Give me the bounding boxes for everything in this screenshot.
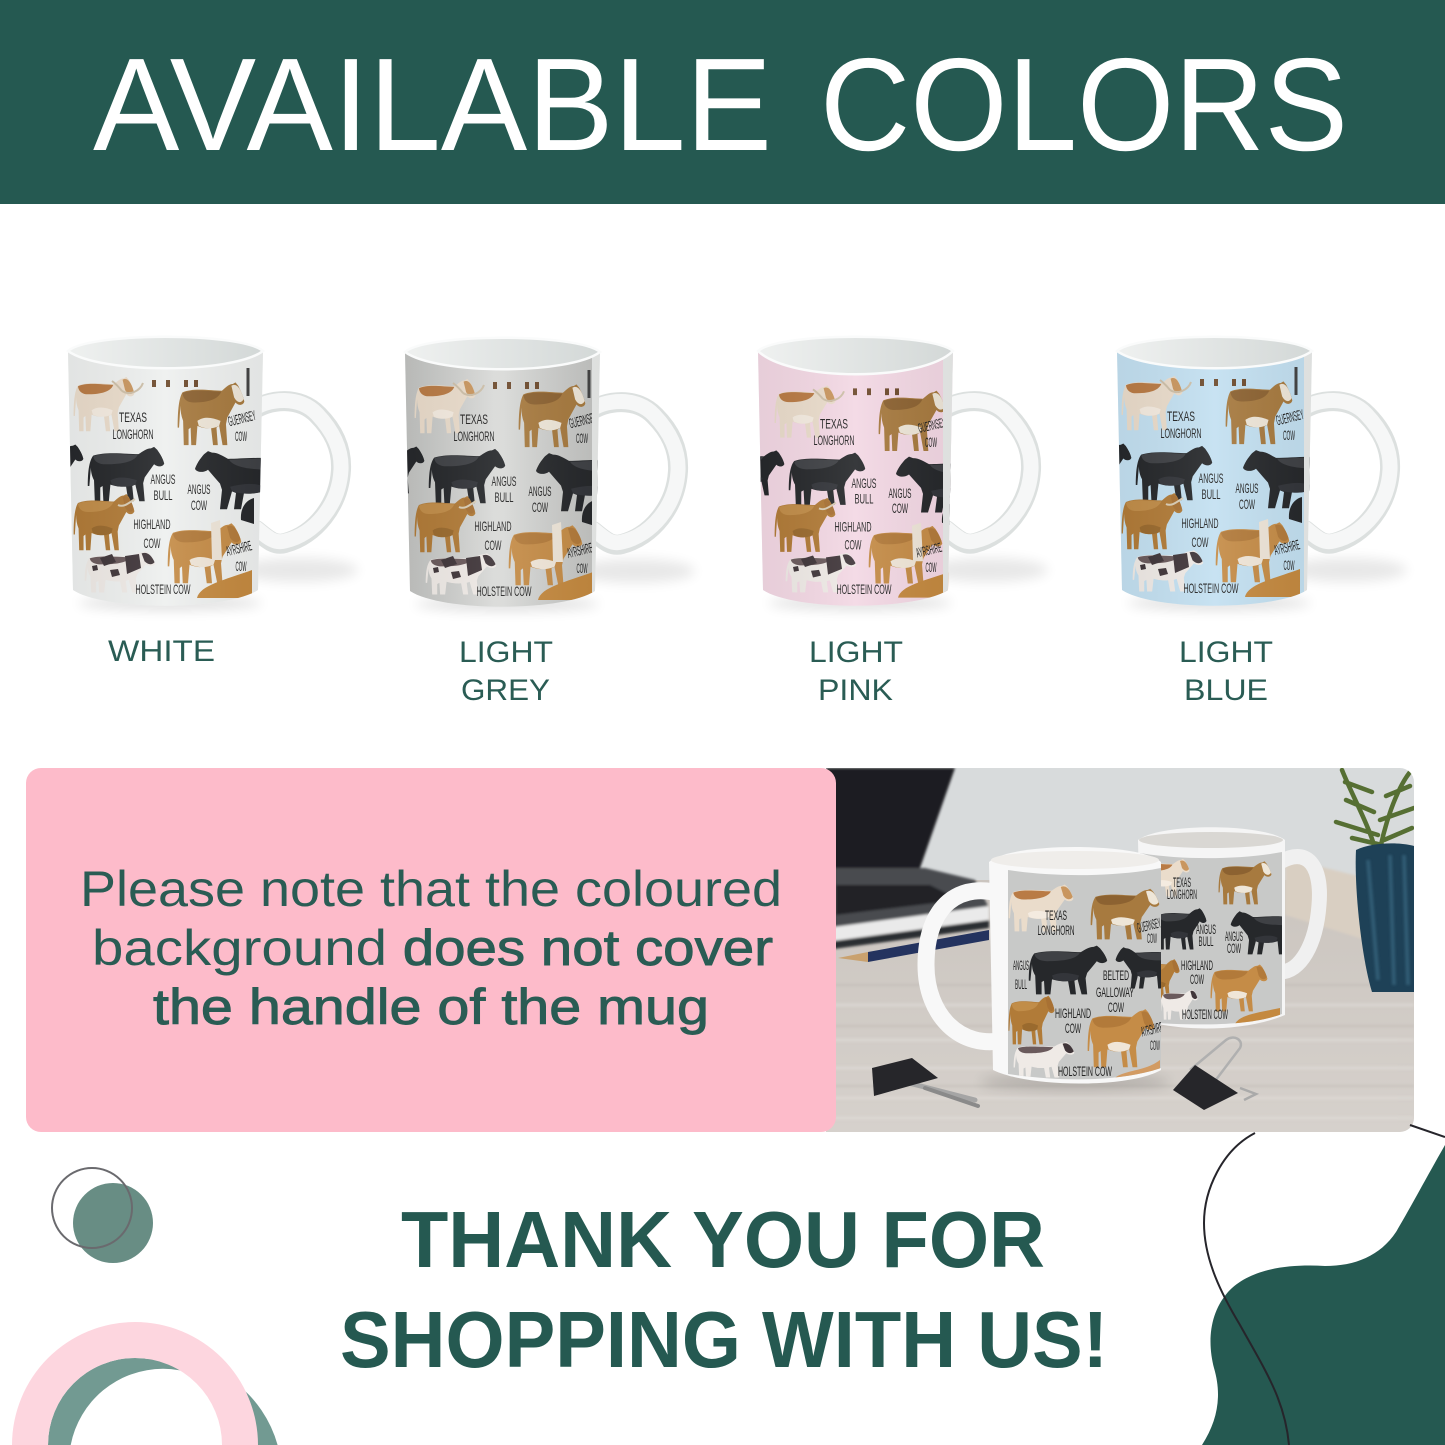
cow print: ANGUS	[852, 476, 877, 491]
front mug print: COW	[1065, 1020, 1081, 1036]
cow print	[758, 353, 953, 606]
back mug print: BULL	[1198, 933, 1214, 949]
cow print: COW	[144, 535, 161, 551]
cow print: LONGHORN	[1160, 425, 1202, 441]
circles decoration	[52, 1168, 153, 1263]
cow print: COW	[191, 497, 207, 513]
colour labels	[108, 635, 1273, 707]
cow print	[70, 368, 261, 598]
front mug	[926, 847, 1174, 1090]
front mug print: LONGHORN	[1038, 922, 1074, 938]
cow print	[1117, 352, 1310, 606]
front mug print: BELTED	[1103, 967, 1129, 983]
cow print: COW	[1284, 557, 1295, 573]
colour labels: LIGHT	[459, 636, 553, 669]
cow print: HIGHLAND	[835, 520, 872, 534]
cow print: GUERNSEY	[1274, 406, 1306, 428]
cow print: BULL	[154, 487, 173, 503]
cow print: LONGHORN	[813, 433, 854, 448]
cow print: BULL	[1202, 486, 1221, 502]
front mug print: TEXAS	[1045, 907, 1067, 923]
cow print: COW	[236, 558, 247, 574]
note text: background does not cover	[92, 920, 773, 976]
wall and desk	[826, 768, 1416, 1132]
cow print: HOLSTEIN COW	[476, 583, 532, 599]
front mug print: COW	[1150, 1037, 1160, 1053]
colour labels: PINK	[818, 674, 893, 707]
cow print: TEXAS	[460, 411, 488, 427]
cow print: COW	[576, 560, 588, 576]
cow print: HOLSTEIN COW	[1184, 580, 1239, 596]
back mug print: HIGHLAND	[1181, 957, 1213, 973]
front mug print: ANGUS	[1013, 957, 1029, 973]
cow print: COW	[1239, 496, 1255, 512]
back mug print: TEXAS	[1173, 874, 1191, 890]
photo: mugs on a desk: AYRSHIRE	[1139, 1019, 1164, 1040]
thank you message: THANK YOU FOR	[401, 1195, 1045, 1284]
cow print: ANGUS	[1236, 480, 1258, 496]
cow print: ANGUS	[188, 481, 210, 497]
mug: light pink	[758, 338, 1046, 614]
cow print: ANGUS	[492, 473, 516, 489]
cow print: COW	[484, 537, 502, 553]
front mug print: BULL	[1015, 976, 1027, 992]
back mug print: COW	[1190, 971, 1204, 987]
cow print: BULL	[855, 492, 874, 507]
cow print: TEXAS	[119, 409, 147, 425]
cow print: TEXAS	[820, 417, 848, 432]
cow print: COW	[576, 430, 588, 446]
cow print: AYRSHIRE	[224, 537, 253, 559]
note text	[80, 861, 782, 1035]
pencil	[838, 930, 989, 962]
cow print: ANGUS	[888, 486, 912, 501]
front mug print: HIGHLAND	[1055, 1005, 1091, 1021]
plant and vase	[1336, 770, 1414, 992]
colour labels: GREY	[461, 674, 550, 707]
mug: white	[68, 338, 356, 614]
cow print: ANGUS	[528, 483, 552, 499]
cow print: LONGHORN	[454, 428, 494, 444]
cow print: BULL	[494, 489, 514, 505]
cow print	[405, 354, 598, 607]
back mug print: COW	[1227, 940, 1241, 956]
cow print: HIGHLAND	[474, 518, 512, 534]
cow print: COW	[926, 560, 937, 575]
back mug print: ANGUS	[1225, 928, 1243, 944]
title	[93, 31, 1348, 178]
front mug print	[1008, 868, 1161, 1080]
colour labels: WHITE	[108, 635, 215, 668]
thank you message: SHOPPING WITH US!	[340, 1295, 1108, 1384]
back mug print	[1140, 852, 1282, 1024]
back mug print: HOLSTEIN COW	[1182, 1006, 1228, 1022]
cow print: GUERNSEY	[916, 415, 947, 436]
mug: light grey	[405, 339, 692, 614]
colour labels: BLUE	[1184, 674, 1268, 707]
mug: light blue	[1117, 338, 1404, 614]
title: COLORS	[820, 31, 1348, 178]
cow print: HIGHLAND	[1182, 515, 1218, 531]
cow print: HOLSTEIN COW	[136, 581, 191, 597]
cow print: AYRSHIRE	[914, 540, 943, 560]
binder clip right	[1173, 1038, 1256, 1110]
cow print: HIGHLAND	[134, 516, 170, 532]
cow print: GUERNSEY	[567, 409, 599, 431]
ring decoration	[12, 1322, 278, 1445]
note text: Please note that the coloured	[80, 861, 782, 917]
cow print: COW	[925, 435, 937, 450]
cow print: AYRSHIRE	[565, 539, 594, 561]
binder clip left	[872, 1058, 978, 1106]
cow print: TEXAS	[1167, 408, 1195, 424]
curved line decoration	[1204, 1125, 1445, 1445]
photo: mugs on a desk: GUERNSEY	[1135, 914, 1163, 936]
cow print: HOLSTEIN COW	[836, 582, 892, 597]
front mug print: COW	[1108, 999, 1124, 1015]
front mug print: COW	[1147, 930, 1157, 946]
back mug print: LONGHORN	[1167, 886, 1197, 902]
thank you message	[340, 1195, 1108, 1384]
cow print: COW	[845, 538, 862, 553]
cow print: COW	[892, 501, 908, 516]
cow print: ANGUS	[150, 471, 176, 487]
front mug print: HOLSTEIN COW	[1058, 1063, 1112, 1079]
cow print: AYRSHIRE	[1272, 536, 1301, 558]
cow print: COW	[532, 499, 548, 515]
note text: the handle of the mug	[153, 979, 709, 1035]
cow print: COW	[1283, 427, 1295, 443]
cow print: GUERNSEY	[226, 407, 258, 429]
cow print: ANGUS	[1198, 470, 1224, 486]
blob decoration	[1202, 1145, 1445, 1445]
colour labels: LIGHT	[809, 636, 903, 669]
cow print: COW	[235, 428, 247, 444]
front mug print: GALLOWAY	[1096, 984, 1134, 1000]
photo: mugs on a desk	[826, 768, 1416, 1132]
colour labels: LIGHT	[1179, 636, 1273, 669]
header band	[0, 0, 1445, 204]
title: AVAILABLE	[93, 31, 772, 178]
laptop	[826, 768, 989, 950]
cow print: COW	[1192, 534, 1209, 550]
note panel	[26, 768, 836, 1132]
back mug	[1138, 827, 1319, 1030]
cow print: LONGHORN	[112, 426, 154, 442]
back mug print: ANGUS	[1196, 921, 1216, 937]
